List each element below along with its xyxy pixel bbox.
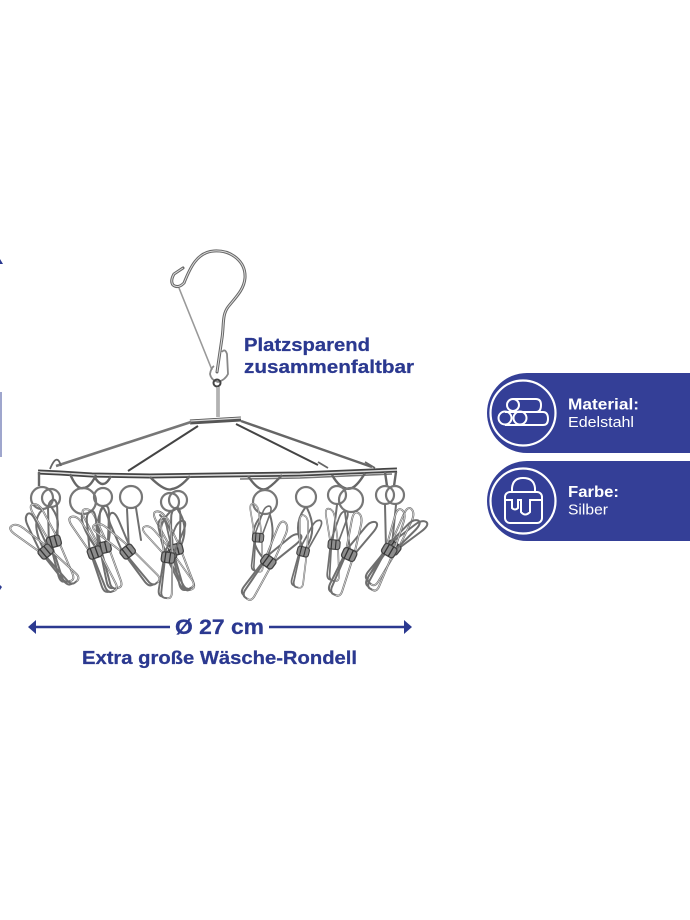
eye loops joining rings to pegs: [36, 505, 396, 558]
clothes pegs: [9, 498, 429, 604]
rings: [31, 486, 404, 514]
label: space-saving foldable: zusammenfaltbar: [244, 356, 414, 377]
product: laundry hanger rondell: [9, 251, 429, 604]
dimension arrow: diameter 27 cm: [28, 616, 412, 639]
panel: colour: [487, 461, 690, 541]
panel: material: Material:: [568, 396, 639, 414]
caption: extra large rondell: Extra große Wäsche-Rondell: [82, 648, 357, 668]
top hub and spokes: [50, 418, 375, 471]
panel: colour: Farbe:: [568, 484, 619, 501]
label: space-saving foldable: Platzsparend: [244, 334, 370, 355]
hanger hook: [172, 251, 245, 417]
circular rail: [38, 470, 397, 490]
panel: material: [487, 373, 690, 453]
left edge: cropped height dimension marker: [0, 259, 3, 590]
dimension arrow: diameter 27 cm: Ø 27 cm: [175, 616, 264, 639]
label: space-saving foldable: [244, 334, 414, 377]
panel: colour: Silber: [568, 502, 608, 518]
icon: steel tubes: [490, 380, 556, 446]
panel: material: Edelstahl: [568, 414, 634, 431]
icon: paint bucket: [490, 468, 556, 534]
